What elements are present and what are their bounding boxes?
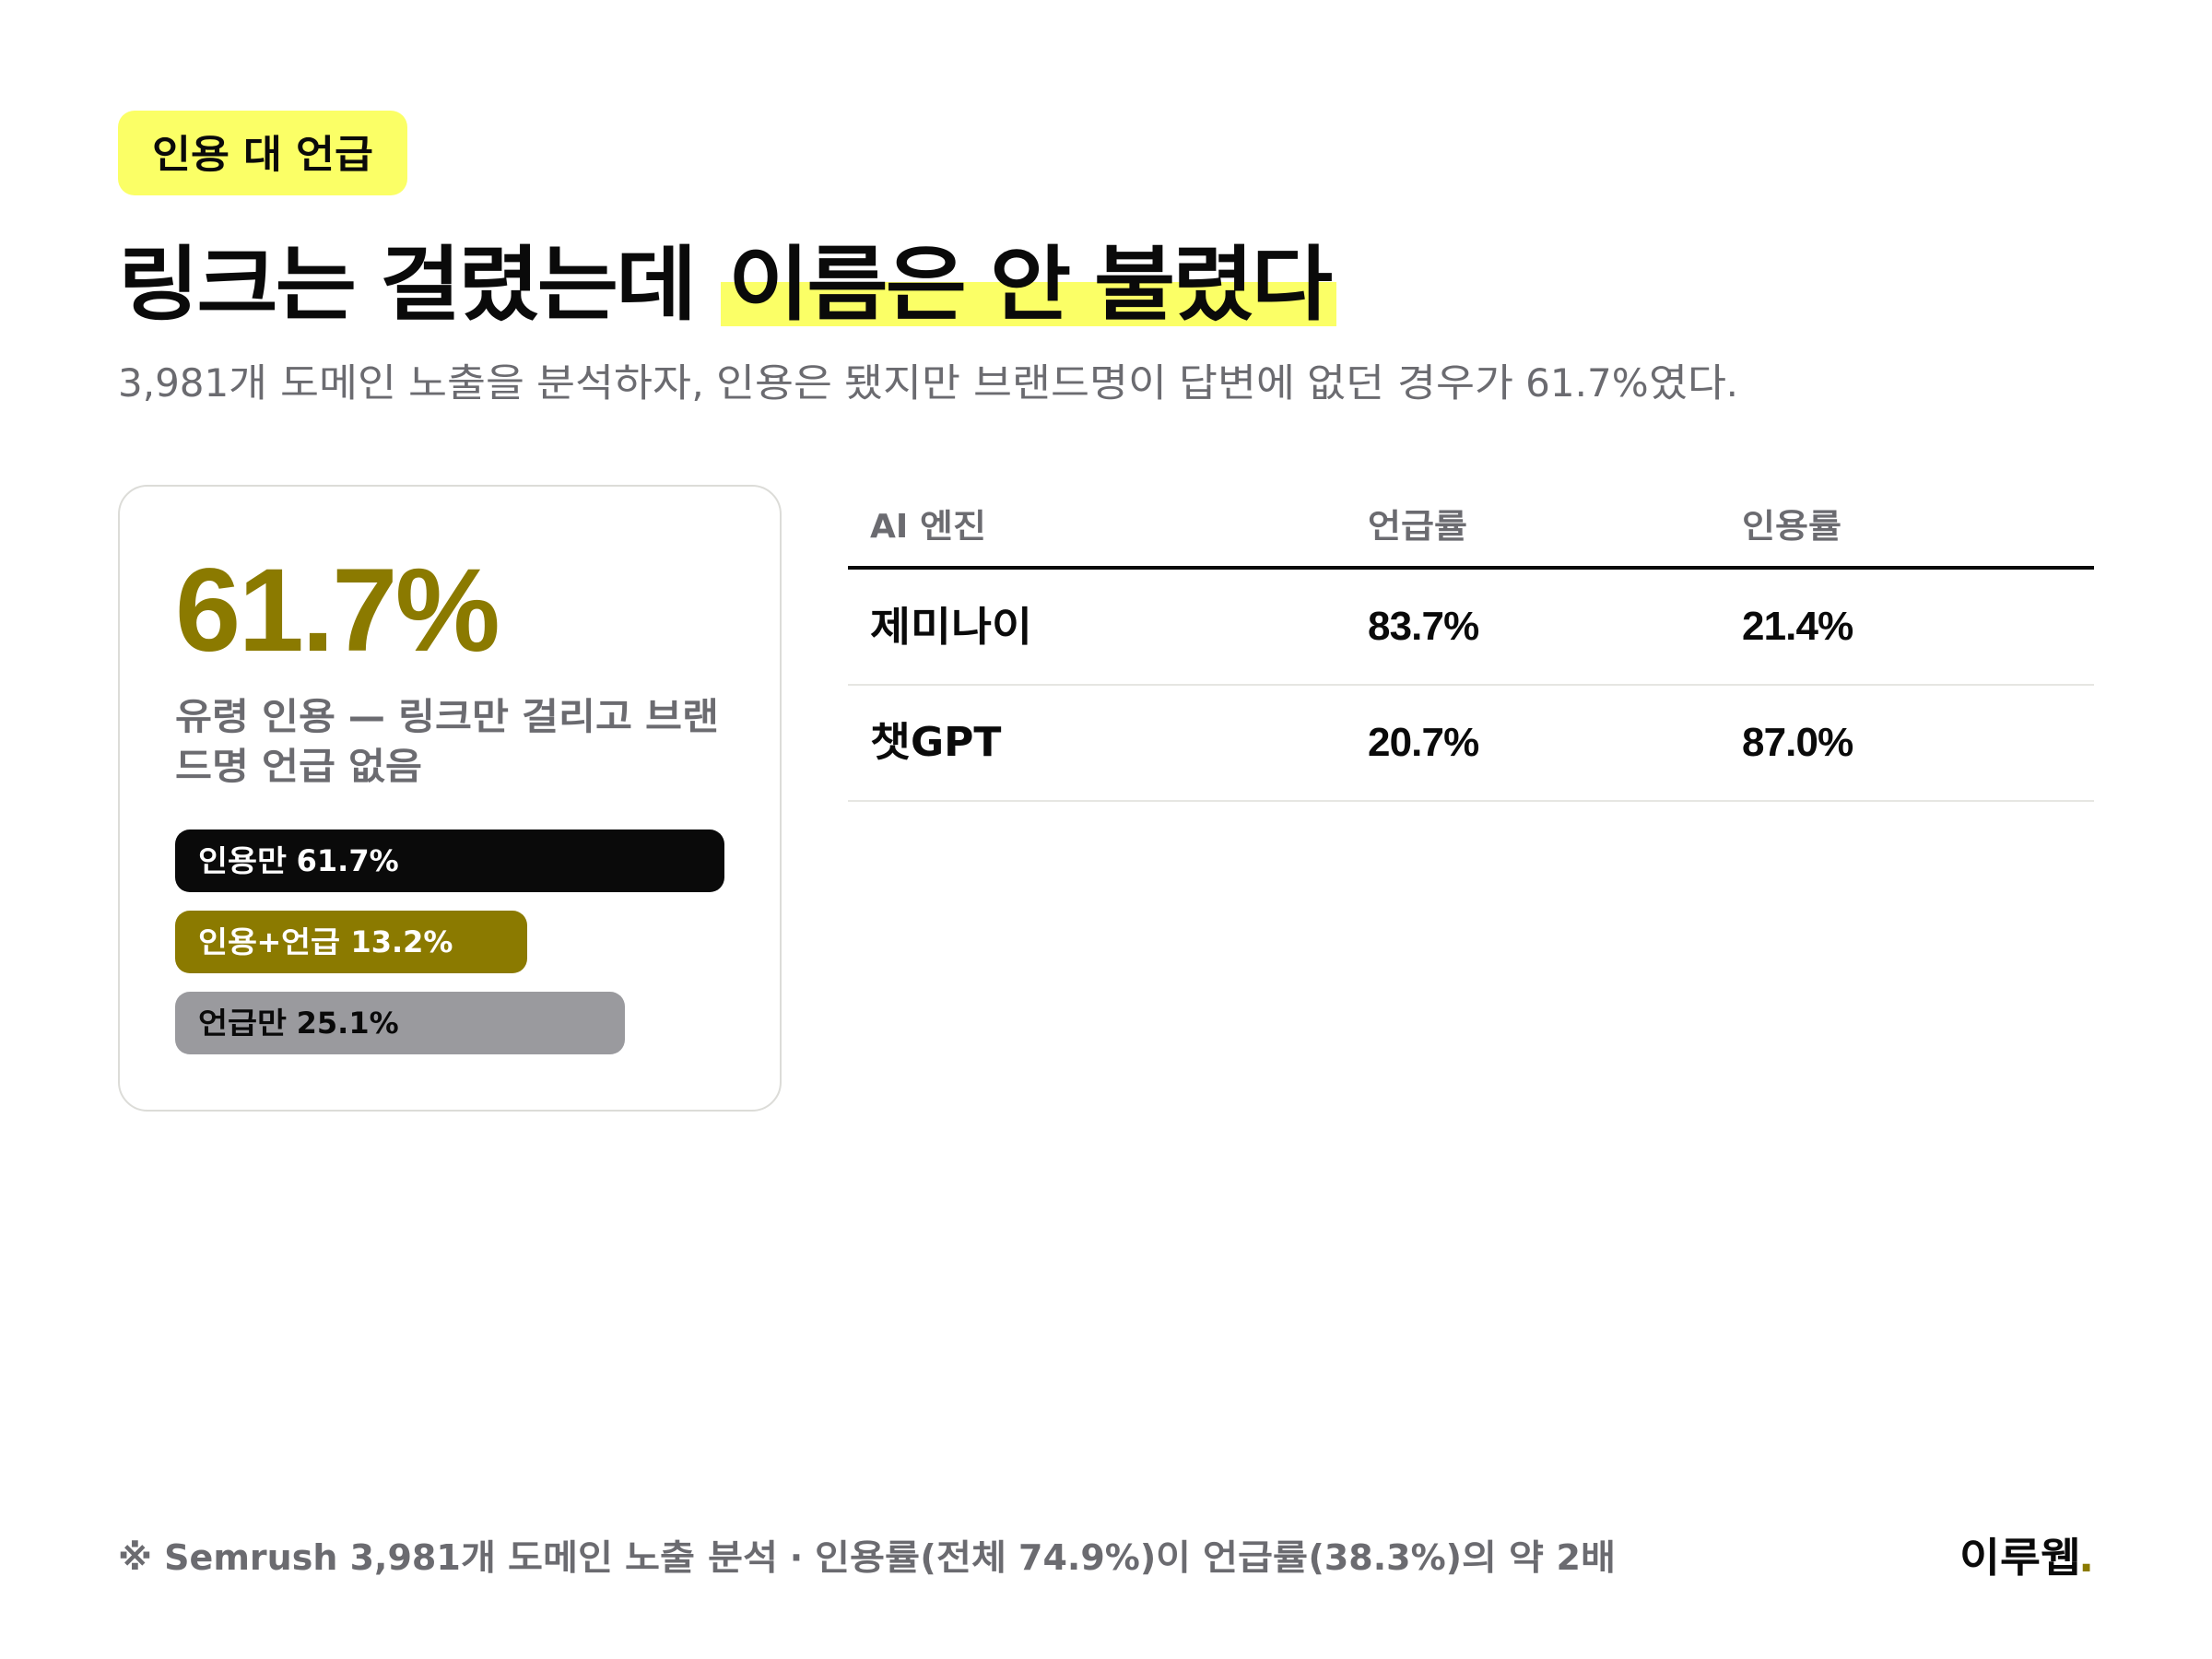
badge: 인용 대 언급: 대 [243, 132, 282, 177]
title: 링크는 [118, 237, 354, 332]
title: 이름은 [728, 237, 964, 332]
row 1 mention: 83.7% [1368, 604, 1478, 649]
row 2 mention: 20.7% [1368, 720, 1478, 765]
badge: 인용 대 언급 [118, 111, 407, 195]
subtitle: 개 [229, 360, 267, 406]
logo: . [2078, 1535, 2094, 1582]
row 2 name [870, 719, 1001, 766]
stat description: 유령 [175, 696, 249, 738]
title: 안 [990, 237, 1068, 332]
row 2 name: 챗 [870, 719, 911, 766]
table header: AI 엔진: 엔진 [920, 508, 986, 546]
bar: 인용+언급: + 13.2% [256, 924, 453, 959]
footnote: 개 [461, 1537, 496, 1578]
table header: 언급률: 언급률 [1368, 508, 1467, 546]
badge: 인용 대 언급: 인용 [152, 132, 229, 177]
badge: 인용 대 언급: 언급 [296, 132, 373, 177]
subtitle: 3,981 , 61.7% . [118, 360, 1738, 406]
bar: 인용+언급: 인용 [197, 924, 257, 959]
title [118, 237, 1332, 332]
footnote: 언급률 [1203, 1537, 1308, 1578]
bar: 인용만: 61.7% [297, 843, 399, 878]
table header: AI 엔진: AI [870, 508, 908, 546]
stat description: 인용 [262, 696, 335, 738]
subtitle: 노출을 [408, 360, 524, 406]
stat description: 걸리고 [522, 696, 632, 738]
bar: 언급만: 언급만 [197, 1006, 287, 1041]
table header: 인용률: 인용률 [1742, 508, 1841, 546]
bar: 인용만 [175, 830, 724, 892]
stat description: 언급 [262, 746, 335, 788]
subtitle: 경우가 [1397, 360, 1513, 406]
table: AI engines [848, 508, 2094, 802]
stat description [175, 696, 719, 788]
subtitle: 브랜드명이 [973, 360, 1167, 406]
stat description: — [348, 696, 385, 738]
subtitle: 됐지만 [844, 360, 960, 406]
row 2 citation: 87.0% [1742, 720, 1853, 765]
footnote: 인용률 [815, 1537, 920, 1578]
stat description: 브랜 [645, 696, 719, 738]
bar: 인용+언급 [175, 911, 527, 973]
bar: 인용만: 인용만 [197, 843, 287, 878]
footnote: 배 [1581, 1537, 1616, 1578]
footnote: 노출 [625, 1537, 695, 1578]
stat description: 드명 [175, 746, 249, 788]
footnote: ※ Semrush 3,981 · ( 74.9%) (38.3%) 2 [118, 1537, 1581, 1578]
row 2 name: GPT [911, 719, 1001, 766]
subtitle: 없던 [1307, 360, 1384, 406]
footnote: 전체 [936, 1537, 1006, 1578]
logo: 이루웹 [1959, 1535, 2081, 1582]
stat description: 링크만 [398, 696, 509, 738]
table header: AI 엔진 [870, 508, 986, 546]
panel: ghost citation stat card [118, 485, 782, 1112]
subtitle: 도메인 [280, 360, 396, 406]
subtitle: 인용은 [716, 360, 832, 406]
row 1 name: 제미나이 [870, 604, 1032, 651]
footnote: 이 [1156, 1537, 1191, 1578]
subtitle: 였다 [1649, 360, 1726, 406]
row 1 citation: 21.4% [1742, 604, 1853, 649]
stat description: 없음 [348, 746, 422, 788]
footnote: 도메인 [508, 1537, 613, 1578]
big number: 61.7% [175, 545, 498, 677]
subtitle: 답변에 [1179, 360, 1295, 406]
title: 불렸다 [1094, 237, 1330, 332]
footnote: 분석 [708, 1537, 778, 1578]
footnote: 의 [1462, 1537, 1497, 1578]
footnote: 약 [1509, 1537, 1544, 1578]
bar: 언급만: 25.1% [297, 1006, 399, 1041]
bar: 언급만 [175, 992, 625, 1054]
bar: 인용+언급: 언급 [281, 924, 340, 959]
title: 걸렸는데 [380, 237, 695, 332]
subtitle: 분석하자 [536, 360, 691, 406]
